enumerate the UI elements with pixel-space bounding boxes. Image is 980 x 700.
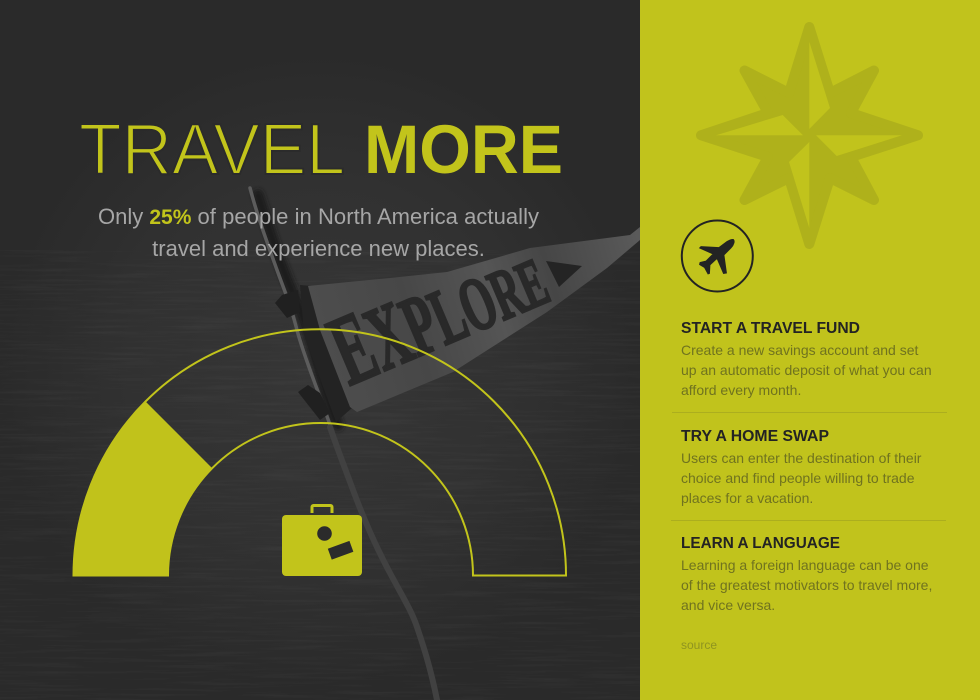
- tip: start a travel fund: START A TRAVEL FUND: [681, 320, 860, 337]
- title: [79, 110, 563, 190]
- source link: source: [681, 638, 717, 652]
- icon: compass star: [701, 27, 918, 244]
- tip: learn a language: LEARN A LANGUAGE: [681, 535, 840, 552]
- subtitle text: travel and experience new places.: [152, 236, 485, 261]
- tip: try a home swap: Users can enter the destination of their: [681, 450, 922, 466]
- subtitle text: [98, 204, 539, 261]
- tip: try a home swap: choice and find people willing to trade: [681, 470, 915, 486]
- tip: learn a language: of the greatest motivators to travel more,: [681, 577, 932, 593]
- pennant flag with EXPLORE lettering: EXPLORE: [314, 218, 562, 406]
- panel: photo background: [0, 0, 640, 700]
- pennant flag with EXPLORE lettering: [308, 218, 640, 412]
- tip: try a home swap: [681, 428, 922, 506]
- subtitle text: Only 25%: [98, 204, 191, 229]
- tip: learn a language: Learning a foreign language can be one: [681, 557, 929, 573]
- icon: suitcase: [282, 506, 362, 576]
- subtitle text: of people in North America actually: [198, 204, 539, 229]
- title: TRAVEL: [79, 110, 345, 190]
- tip: try a home swap: places for a vacation.: [681, 490, 813, 506]
- gauge chart: 25 percent: [73, 329, 566, 576]
- tip: learn a language: [681, 535, 932, 613]
- pennant stick: [250, 188, 437, 700]
- tip: start a travel fund: Create a new savings account and set: [681, 342, 918, 358]
- tip: learn a language: and vice versa.: [681, 597, 775, 613]
- tip: try a home swap: TRY A HOME SWAP: [681, 428, 829, 445]
- title: MORE: [364, 111, 563, 188]
- tip: start a travel fund: afford every month.: [681, 382, 801, 398]
- panel: tips sidebar: [640, 0, 980, 700]
- tip: start a travel fund: up an automatic deposit of what you can: [681, 362, 932, 378]
- tip: start a travel fund: [681, 320, 932, 398]
- icon: airplane in circle: [682, 220, 753, 292]
